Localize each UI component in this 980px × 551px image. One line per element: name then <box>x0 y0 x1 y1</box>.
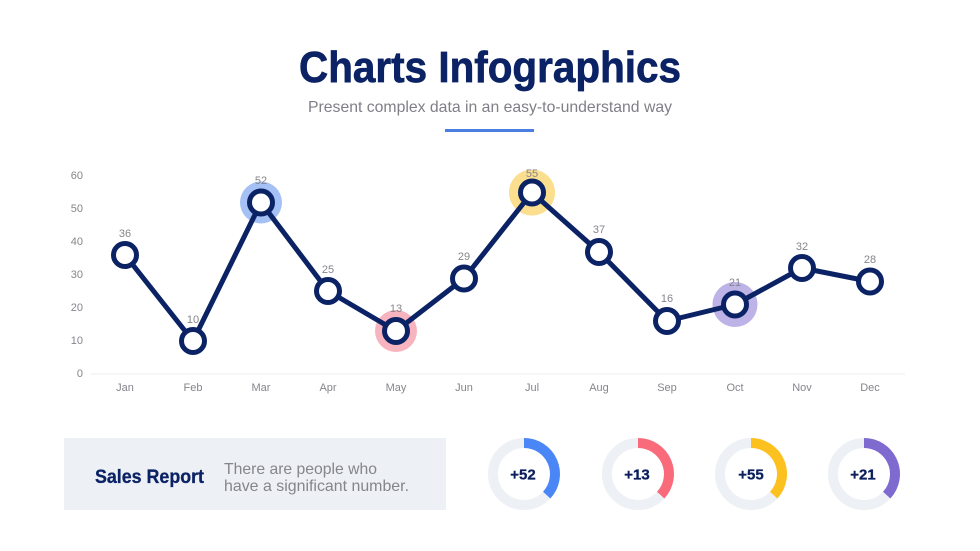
x axis labels: Apr <box>319 382 337 394</box>
sales report heading: Sales Report <box>95 467 205 488</box>
data value labels: 37 <box>593 224 605 236</box>
x axis labels <box>116 382 880 394</box>
donut: +13: +13 <box>624 466 650 484</box>
donut: +52 <box>493 443 555 505</box>
data value labels: 13 <box>390 303 402 315</box>
subtitle: Present complex data in an easy-to-understand way <box>308 99 672 116</box>
title accent bar <box>445 129 534 132</box>
x axis line <box>91 373 905 375</box>
sales report description: have a significant number. <box>224 478 409 495</box>
data value labels: 10 <box>187 314 199 326</box>
data value labels <box>119 168 876 326</box>
data value labels: 21 <box>729 277 741 289</box>
data markers <box>114 181 882 352</box>
y axis labels: 10 <box>71 335 83 347</box>
panel: sales report <box>64 438 446 510</box>
x axis labels: Aug <box>589 382 609 394</box>
x axis labels: May <box>386 382 407 394</box>
donut: +55 <box>720 443 782 505</box>
y axis labels: 40 <box>71 236 83 248</box>
highlight halos <box>240 170 758 352</box>
y axis labels: 0 <box>77 368 83 380</box>
x axis labels: Nov <box>792 382 812 394</box>
y axis labels: 60 <box>71 170 83 182</box>
x axis labels: Jun <box>455 382 473 394</box>
y axis labels: 30 <box>71 269 83 281</box>
data value labels: 16 <box>661 293 673 305</box>
y axis labels: 20 <box>71 302 83 314</box>
x axis labels: Sep <box>657 382 677 394</box>
y axis labels <box>71 170 83 380</box>
sales report description: There are people who <box>224 461 377 478</box>
title: Charts Infographics <box>299 43 681 92</box>
donut: +21 <box>833 443 895 505</box>
data value labels: 55 <box>526 168 538 180</box>
x axis labels: Jul <box>525 382 539 394</box>
data value labels: 29 <box>458 251 470 263</box>
donut: +21: +21 <box>850 466 876 484</box>
data value labels: 36 <box>119 228 131 240</box>
x axis labels: Feb <box>184 382 202 394</box>
donut: +13 <box>607 443 669 505</box>
data value labels: 32 <box>796 241 808 253</box>
donut: +55: +55 <box>738 466 764 484</box>
data value labels: 52 <box>255 175 267 187</box>
donut: +52: +52 <box>510 466 536 484</box>
x axis labels: Mar <box>252 382 271 394</box>
data value labels: 28 <box>864 254 876 266</box>
y axis labels: 50 <box>71 203 83 215</box>
data line <box>125 192 870 341</box>
x axis labels: Oct <box>726 382 744 394</box>
x axis labels: Jan <box>116 382 134 394</box>
line chart <box>71 168 905 394</box>
data value labels: 25 <box>322 264 334 276</box>
sales report description <box>224 461 409 495</box>
x axis labels: Dec <box>860 382 880 394</box>
